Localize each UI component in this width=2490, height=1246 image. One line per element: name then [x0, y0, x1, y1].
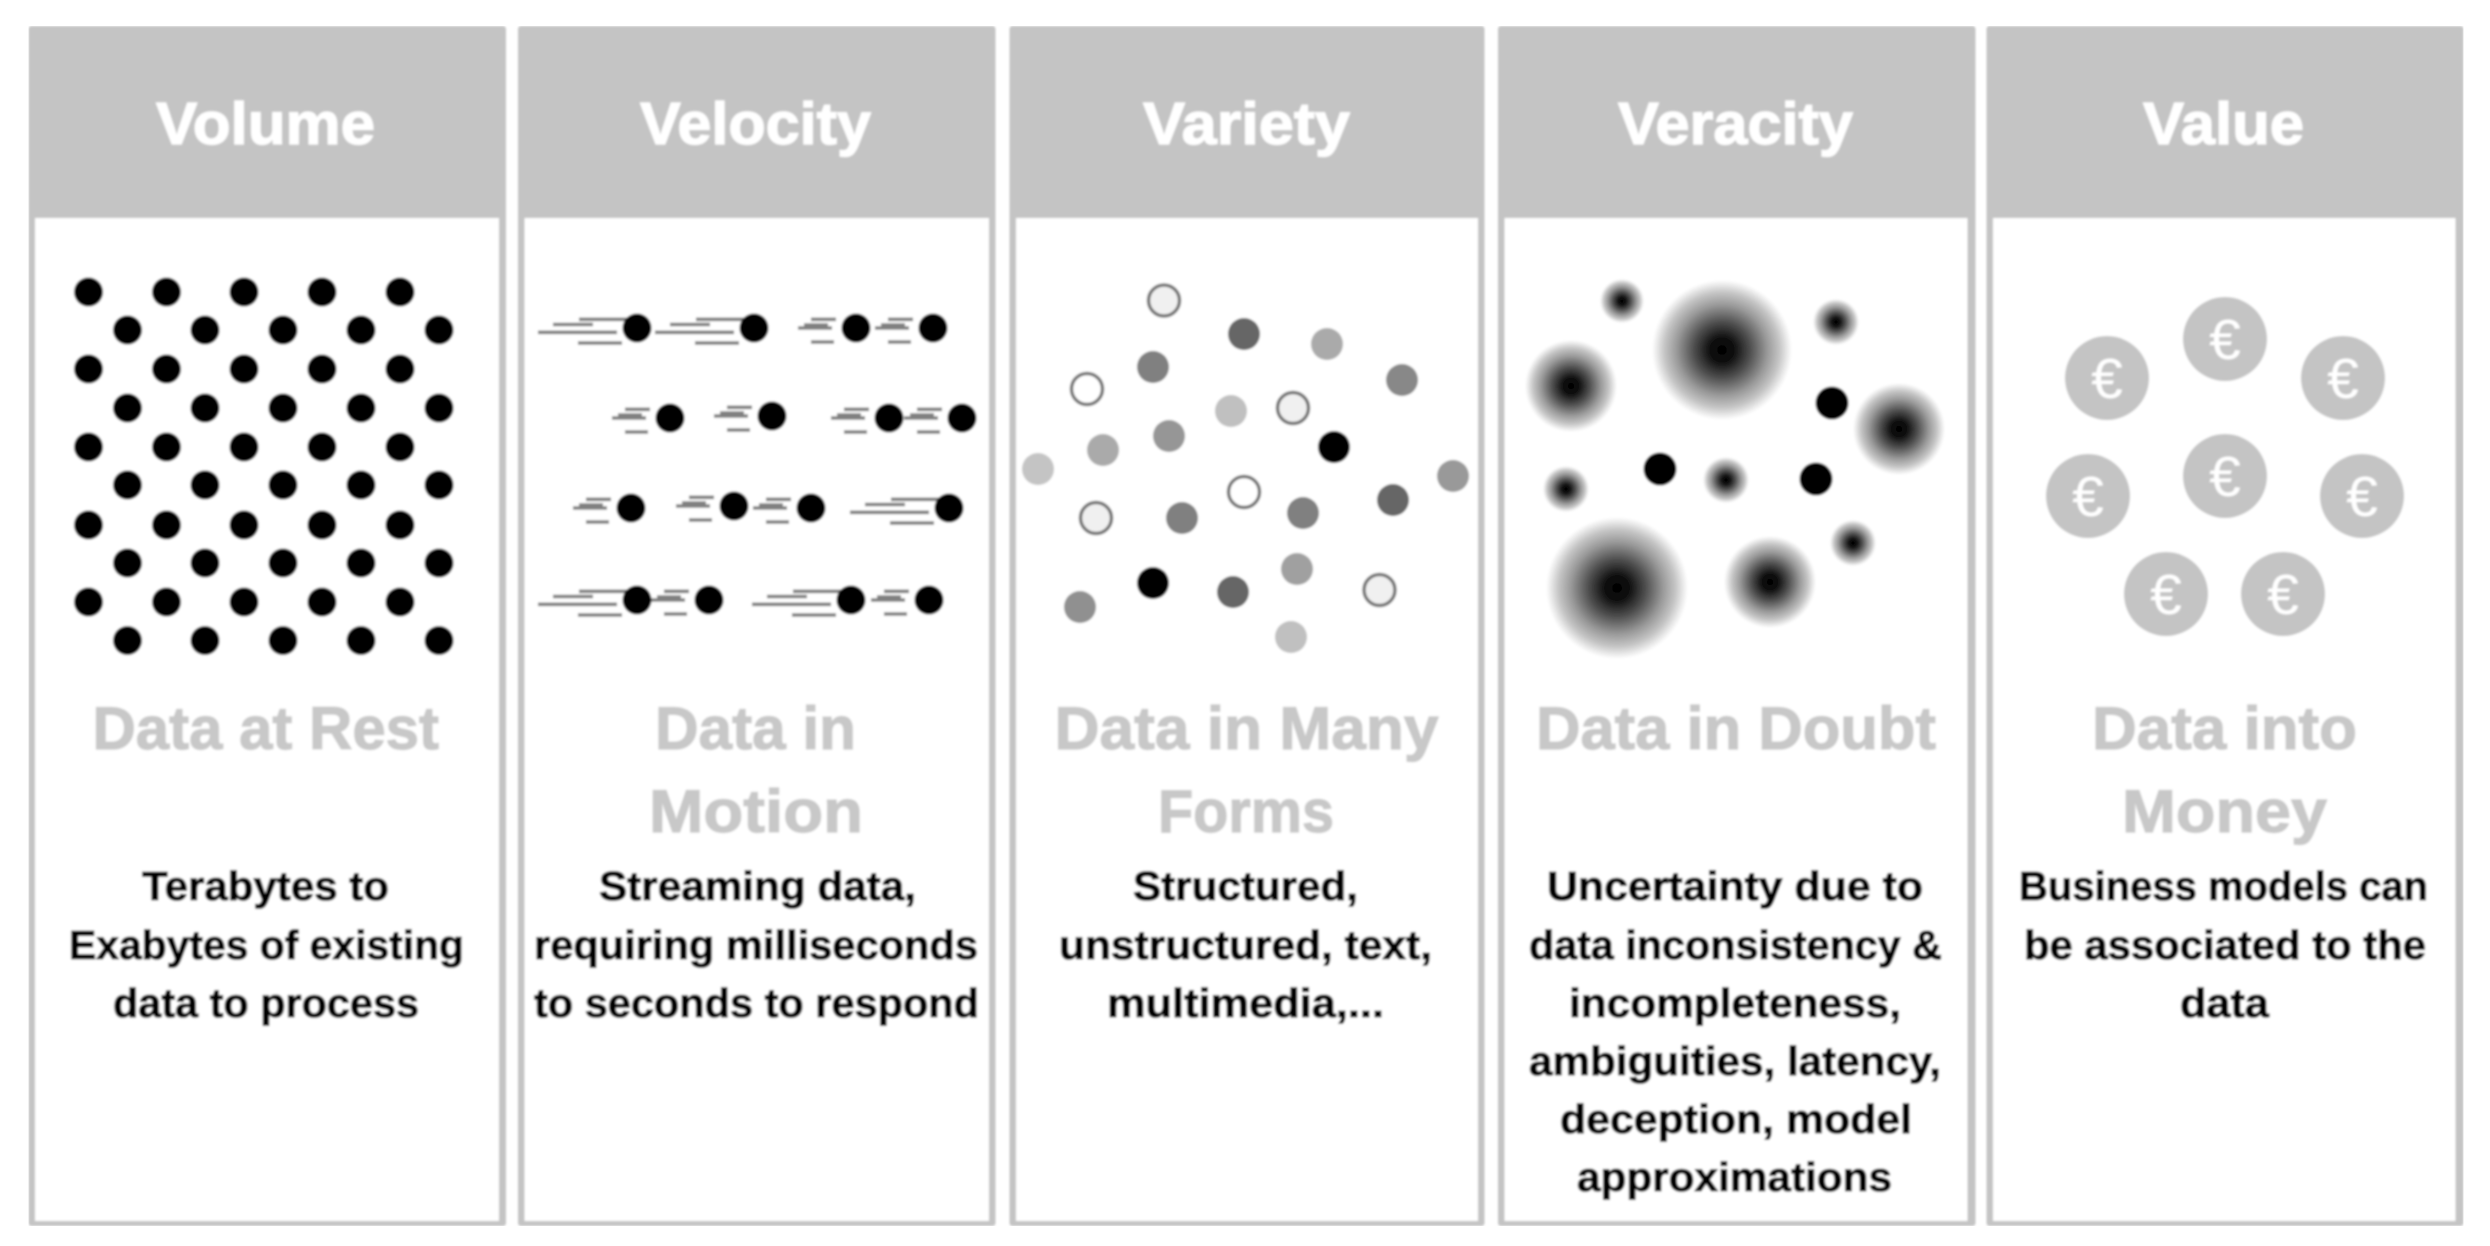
- description: Variety: multimedia,...: [1107, 980, 1384, 1026]
- icon: euro coins: €: [2209, 445, 2241, 509]
- description: Veracity: incompleteness,: [1569, 980, 1901, 1026]
- icon: regular grid of black dots: [74, 278, 454, 655]
- description: Variety: Structured,: [1133, 863, 1358, 909]
- icon: blurred uncertain dots: [1525, 279, 1945, 659]
- heading: Value: Value: [2143, 91, 2304, 157]
- description: Veracity: deception, model: [1560, 1096, 1912, 1142]
- description: Value: be associated to the: [2024, 922, 2426, 968]
- subheading: Data in Many Forms: [1054, 695, 1439, 845]
- subheading: Data in Motion: Data in: [655, 695, 856, 762]
- icon: euro coins: [2046, 297, 2404, 636]
- icon: euro coins: €: [2209, 308, 2241, 372]
- description: Velocity: Streaming data,: [599, 863, 916, 909]
- description: Veracity: approximations: [1577, 1154, 1892, 1200]
- icon: euro coins: €: [2150, 563, 2182, 627]
- panel frame: Variety: [1010, 26, 1484, 1226]
- panel: Volume: [28, 26, 506, 1226]
- description: Variety: unstructured, text,: [1059, 922, 1432, 968]
- subheading: Data at Rest: Data at Rest: [92, 695, 439, 762]
- heading: Velocity: Velocity: [640, 91, 871, 157]
- description: Veracity: ambiguities, latency,: [1529, 1038, 1941, 1084]
- panel frame: Value: [1986, 26, 2464, 1226]
- subheading: Data into Money: [2092, 695, 2357, 845]
- icon: dots of many shades and outlines: [1022, 285, 1469, 653]
- subheading: Data in Many Forms: Forms: [1158, 778, 1334, 845]
- panel: Variety: [1010, 26, 1484, 1226]
- description: Volume: data to process: [113, 980, 419, 1026]
- subheading: Data in Motion: Motion: [649, 778, 863, 845]
- icon: euro coins: €: [2327, 347, 2359, 411]
- icon: euro coins: €: [2346, 465, 2378, 529]
- heading: Variety: Variety: [1143, 91, 1350, 157]
- subheading: Data in Motion: [649, 695, 863, 845]
- heading: Veracity: Veracity: [1618, 91, 1853, 157]
- subheading: Data into Money: Data into: [2092, 695, 2357, 762]
- description: Volume: [69, 863, 464, 1026]
- icon: euro coins: €: [2091, 347, 2123, 411]
- panel frame: Velocity: [518, 26, 996, 1226]
- subheading: Data in Doubt: Data in Doubt: [1536, 695, 1936, 762]
- description: Velocity: requiring milliseconds: [534, 922, 978, 968]
- heading: Volume: Volume: [156, 91, 375, 157]
- description: Velocity: [534, 863, 979, 1026]
- description: Volume: Terabytes to: [142, 863, 389, 909]
- panel: Veracity: [1498, 26, 1976, 1226]
- subheading: Data into Money: Money: [2122, 778, 2328, 845]
- panel frame: Volume: [28, 26, 506, 1226]
- icon: euro coins: €: [2267, 563, 2299, 627]
- description: Value: data: [2180, 980, 2270, 1026]
- description: Value: Business models can: [2019, 863, 2428, 909]
- panel frame: Veracity: [1498, 26, 1976, 1226]
- description: Veracity: [1529, 863, 1942, 1200]
- subheading: Data in Many Forms: Data in Many: [1054, 695, 1439, 762]
- description: Variety: [1059, 863, 1432, 1026]
- description: Volume: Exabytes of existing: [69, 922, 464, 968]
- panel: Velocity: [518, 26, 996, 1226]
- description: Velocity: to seconds to respond: [534, 980, 979, 1026]
- panel: Value: [1986, 26, 2464, 1226]
- description: Veracity: data inconsistency &: [1529, 922, 1942, 968]
- icon: euro coins: €: [2072, 465, 2104, 529]
- icon: moving dots with speed lines: [538, 314, 976, 615]
- description: Value: [2019, 863, 2428, 1026]
- description: Veracity: Uncertainty due to: [1547, 863, 1923, 909]
